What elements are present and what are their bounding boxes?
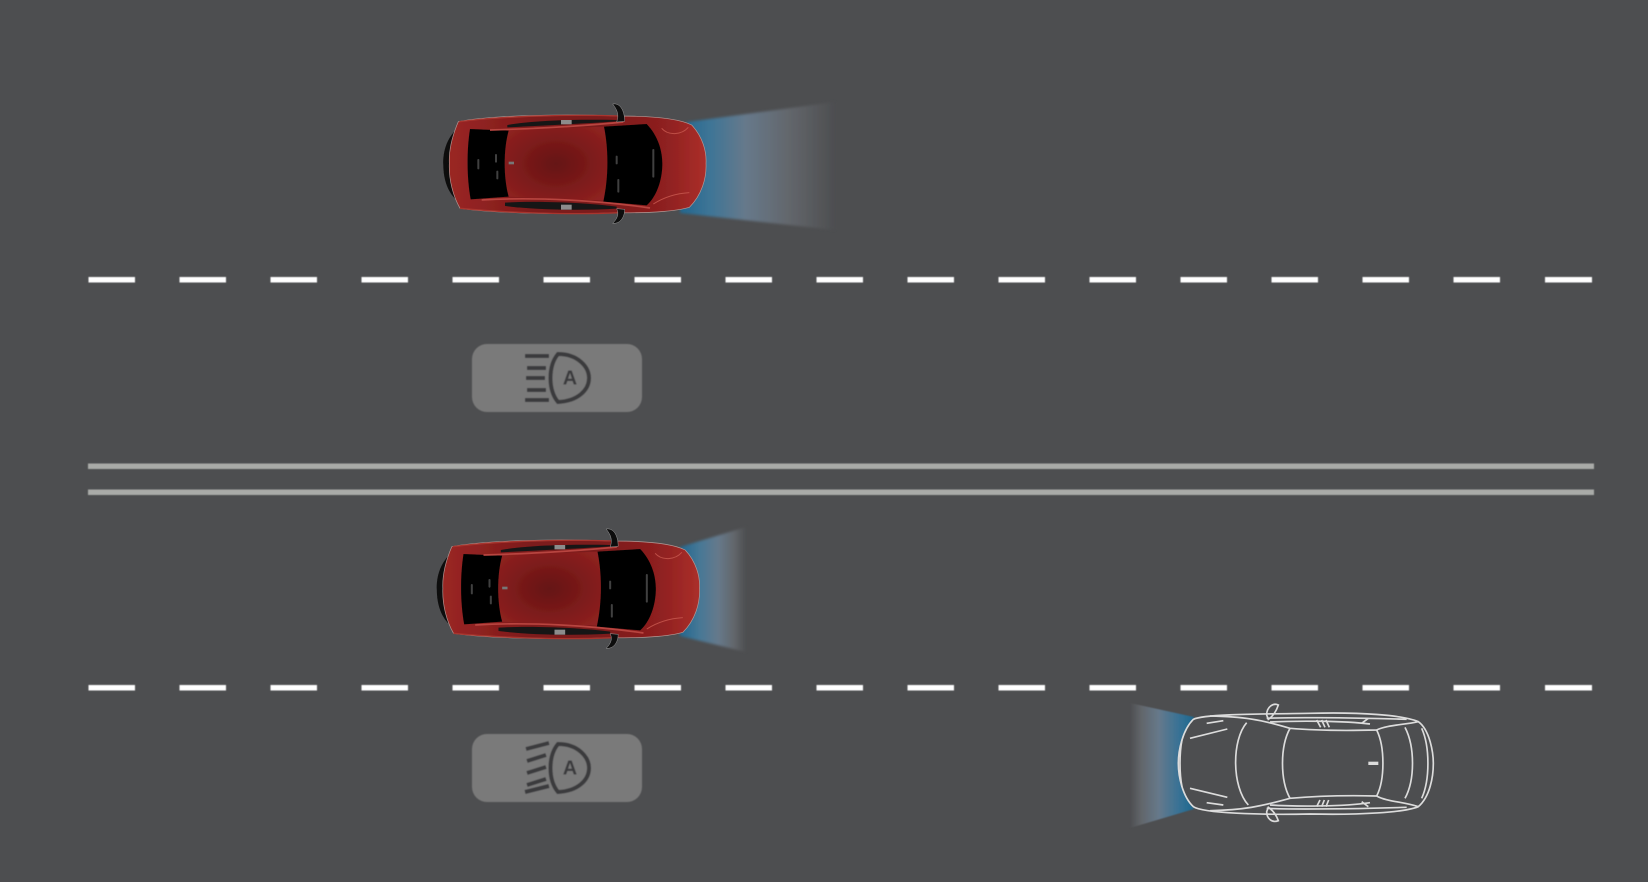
oncoming car outline <box>1178 704 1433 821</box>
auto high beam indicator: bottom badge: A <box>563 758 577 780</box>
dashed lane line: bottom <box>88 685 1592 690</box>
headlight beam: lower car dipped <box>680 527 746 652</box>
red car: top lane <box>443 104 706 223</box>
headlight beam: oncoming car <box>1130 703 1194 828</box>
dashed lane line: top <box>88 277 1592 282</box>
auto high beam indicator: top badge <box>472 344 642 412</box>
auto high beam indicator: top badge: A <box>563 368 577 390</box>
auto high beam indicator: bottom badge <box>472 734 642 802</box>
red car: lower lane <box>437 529 700 648</box>
double centre line <box>88 464 1594 495</box>
headlight beam: top car high beam <box>680 102 835 230</box>
